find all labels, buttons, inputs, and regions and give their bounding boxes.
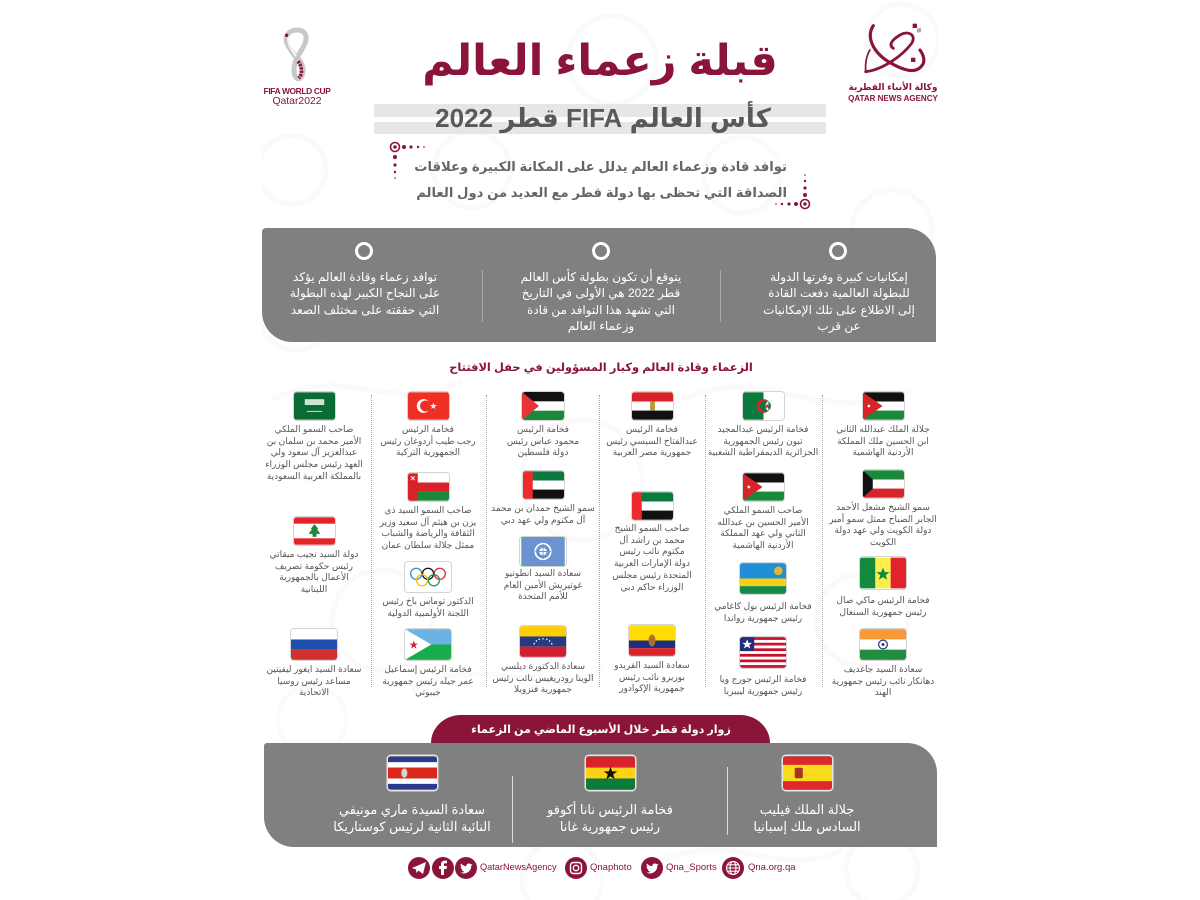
logo: FIFA World Cup Qatar 2022 — [264, 28, 331, 107]
name — [836, 424, 930, 458]
name: اللبنانية — [301, 584, 327, 594]
name: بوريرو نائب رئيس — [619, 672, 685, 682]
name — [753, 801, 861, 835]
social handle: website: Qna.org.qa — [748, 862, 796, 873]
name — [717, 505, 809, 550]
name: محمد بن راشد آل — [619, 535, 685, 545]
leader: Kuwait — [828, 469, 937, 548]
ornament: top left dots — [390, 142, 425, 179]
reason text 3: التي حققته على مختلف الصعد — [291, 303, 439, 317]
name: فخامة الرئيس — [402, 424, 454, 434]
social: website — [722, 857, 744, 879]
leader: UN Secretary General — [504, 536, 582, 602]
leader: Liberia — [720, 636, 806, 696]
leader: Palestine — [507, 391, 579, 458]
name: جمهورية الإكوادور — [619, 683, 685, 693]
reason text 1 — [763, 270, 915, 333]
name: دولة الكويت ولي عهد دولة — [835, 525, 931, 535]
leader: IOC president — [371, 562, 485, 619]
leader: Egypt — [606, 391, 698, 458]
logo: Qatar News Agency — [848, 24, 938, 103]
flag: India — [860, 629, 906, 660]
logo text — [264, 86, 331, 107]
flag: Ghana — [586, 756, 634, 790]
name: الدكتور توماس باخ رئيس — [382, 596, 474, 606]
agency Arabic name: وكالة الأنباء القطرية — [848, 82, 938, 92]
name: جلالة الملك عبدالله الثاني — [836, 424, 930, 434]
name: العهد رئيس مجلس الوزراء — [265, 459, 363, 469]
name: فخامة الرئيس بول كاغامي — [714, 601, 812, 611]
name — [720, 674, 806, 696]
leader: Russia — [257, 629, 371, 699]
visitor: Ghana — [550, 756, 670, 836]
flag: Jordan — [862, 392, 904, 420]
reason marker 2 — [592, 242, 610, 260]
flag: Ecuador — [629, 625, 675, 656]
reason marker 3 — [355, 242, 373, 260]
name — [371, 596, 485, 619]
name: الأردنية الهاشمية — [853, 447, 913, 457]
name: الأعمال بالجمهورية — [279, 572, 349, 582]
flag: Costa Rica — [388, 756, 436, 790]
flag: UAE — [632, 492, 672, 520]
name — [257, 424, 371, 483]
name: عمر جيله رئيس جمهورية — [382, 676, 474, 686]
leader: Jordan crown prince — [717, 472, 809, 550]
visitor: Spain — [747, 756, 867, 836]
social: Telegram — [408, 857, 430, 879]
flag: Algeria — [742, 392, 784, 420]
name: سعادة السيد الفريدو — [614, 660, 690, 670]
name: سمو الشيخ حمدان بن محمد — [491, 503, 595, 513]
name: جلالة الملك فيليب — [760, 802, 854, 817]
name — [836, 595, 930, 618]
leader: India — [832, 628, 934, 698]
name: الثقافة والرياضة والشباب — [381, 528, 475, 538]
panel: visitors — [264, 743, 937, 847]
social handle: QatarNewsAgency: QatarNewsAgency — [480, 862, 557, 872]
social: Twitter sports — [641, 857, 663, 879]
name: الوزراء حاكم دبي — [621, 582, 683, 592]
leader: Rwanda — [714, 562, 812, 624]
flag: UAE — [522, 471, 564, 499]
name: الجابر الصباح ممثل سمو أمير — [829, 514, 937, 524]
name: الوينا رودريغيس نائب رئيس — [492, 673, 594, 683]
flag: Spain — [782, 756, 832, 790]
name — [714, 601, 812, 624]
flag: Russia — [291, 629, 337, 660]
ornament: bottom right dots — [775, 174, 810, 210]
intro text — [414, 159, 787, 200]
name: فخامة الرئيس — [626, 424, 678, 434]
name: غوتيريش الأمين العام — [504, 580, 582, 590]
social: Facebook — [432, 857, 454, 879]
leader: UAE vice president — [612, 491, 692, 592]
name: رئيس جمهورية غانا — [560, 819, 660, 834]
name: رئيس جمهورية السنغال — [840, 607, 926, 617]
flag: Saudi Arabia — [294, 392, 334, 420]
name: الكويت — [870, 537, 896, 547]
social handle: Qnaphoto: Qnaphoto — [590, 862, 632, 873]
name — [547, 801, 673, 835]
name: جمهورية فنزويلا — [514, 684, 572, 694]
leader: Ecuador — [614, 624, 690, 694]
reason marker 1 — [829, 242, 847, 260]
name — [832, 664, 934, 698]
intro text: الصداقة التي تحظى بها دولة قطر مع العديد من دول العالم — [416, 185, 787, 200]
leader: Djibouti — [371, 629, 485, 699]
name: الجمهورية التركية — [396, 447, 460, 457]
name: فخامة الرئيس — [517, 424, 569, 434]
name: الجزائرية الديمقراطية الشعبية — [708, 447, 818, 457]
flag: Lebanon — [294, 517, 334, 545]
name: صاحب السمو الشيخ — [615, 523, 689, 533]
reason text 3: على النجاح الكبير لهذه البطولة — [290, 286, 440, 300]
flag: Jordan — [742, 473, 784, 501]
flag: Palestine — [522, 392, 564, 420]
icon: QNA orbit emblem — [864, 24, 926, 74]
name: فخامة الرئيس جورج ويا — [720, 674, 806, 684]
flag: Liberia — [740, 637, 786, 668]
reason text 1: إمكانيات كبيرة وفرتها الدولة — [770, 270, 908, 284]
leader: Jordan king — [836, 391, 930, 458]
name: الاتحادية — [299, 687, 329, 697]
reason text 1: عن قرب — [817, 319, 861, 333]
visitor: Costa Rica — [352, 756, 472, 836]
name: الهند — [875, 687, 891, 697]
name — [614, 660, 690, 694]
logo text: FIFA WORLD CUP — [264, 86, 330, 96]
name — [371, 664, 485, 699]
name — [828, 502, 937, 548]
name: للأمم المتحدة — [518, 591, 568, 601]
name: مساعد رئيس روسيا — [277, 676, 351, 686]
name: فخامة الرئيس نانا أكوفو — [547, 802, 673, 817]
reason text 2: التي تشهد هذا التوافد من قادة — [527, 303, 675, 317]
name — [504, 568, 582, 602]
flag: Venezuela — [520, 626, 566, 657]
name: سعادة السيدة ماري مونيفي — [339, 802, 485, 817]
name: النائبة الثانية لرئيس كوستاريكا — [333, 819, 491, 834]
name: فخامة الرئيس ماكي صال — [836, 595, 930, 605]
name — [612, 523, 692, 592]
name — [491, 503, 595, 526]
name: دولة السيد نجيب ميقاتي — [270, 549, 358, 559]
intro text: توافد قادة وزعماء العالم يدلل على المكانة الكبيرة وعلاقات — [414, 159, 787, 174]
name: تبون رئيس الجمهورية — [723, 436, 803, 446]
reason text 2: وزعماء العالم — [568, 319, 634, 333]
name: صاحب السمو الملكي — [724, 505, 802, 515]
name: دولة فلسطين — [518, 447, 568, 457]
leader: Oman — [371, 473, 485, 552]
leader: Dubai crown prince — [491, 470, 595, 526]
name: صاحب السمو السيد ذي — [384, 505, 472, 515]
subtitle text: كأس العالم FIFA قطر 2022 — [435, 103, 771, 133]
social handle: Qna_Sports: Qna_Sports — [666, 862, 717, 873]
name: رئيس جمهورية ليبيريا — [724, 686, 802, 696]
name: رئيس حكومة تصريف — [275, 561, 353, 571]
flag: Kuwait — [862, 470, 904, 498]
name — [507, 424, 579, 458]
subtitle with grey bars — [374, 101, 826, 134]
name: سمو الشيخ مشعل الأحمد — [836, 502, 930, 512]
leader: Lebanon — [257, 517, 371, 596]
name: بالمملكة العربية السعودية — [267, 471, 361, 481]
flag: United Nations — [520, 537, 566, 566]
logo text: Qatar2022 — [272, 96, 322, 107]
name: جمهورية مصر العربية — [613, 447, 691, 457]
agency English name: QATAR NEWS AGENCY — [848, 94, 938, 103]
name: رجب طيب أردوغان رئيس — [380, 436, 476, 446]
reason text 3 — [290, 270, 440, 317]
name: دهانكار نائب رئيس جمهورية — [832, 676, 934, 686]
name: المتحدة رئيس مجلس — [612, 570, 692, 580]
ribbon: visitors heading — [431, 715, 770, 743]
name — [333, 801, 491, 835]
name: الثاني ولي عهد المملكة — [720, 528, 806, 538]
name — [486, 661, 600, 696]
name: جيبوتي — [415, 687, 441, 697]
name: مكتوم نائب رئيس — [619, 546, 685, 556]
flag: Oman — [408, 473, 448, 501]
flag: Senegal — [860, 557, 906, 589]
reason text 2 — [521, 268, 681, 333]
title: قبلة زعماء العالم — [422, 37, 778, 85]
reason text 2: قطر 2022 هي الأولى في التاريخ — [522, 286, 680, 300]
leader: Saudi Arabia — [257, 392, 371, 483]
flag: Turkey — [408, 392, 448, 420]
leader: Turkey — [371, 392, 485, 459]
name — [606, 424, 698, 458]
name: الأردنية الهاشمية — [733, 540, 793, 550]
name: عبدالفتاح السيسي رئيس — [606, 436, 698, 446]
name — [708, 424, 818, 458]
reason text 2: يتوقع أن تكون بطولة كأس العالم — [521, 270, 681, 284]
flag: Egypt — [632, 392, 672, 420]
name: رئيس جمهورية رواندا — [724, 613, 802, 623]
name: سعادة السيد جاغديف — [844, 664, 922, 674]
section heading: leaders: الزعماء وقادة العالم وكبار المسؤولين في حفل الافتتاح — [449, 362, 753, 374]
reason text 1: إلى الاطلاع على تلك الإمكانيات — [763, 303, 915, 317]
name: الأمير محمد بن سلمان بن — [267, 436, 361, 446]
name — [371, 505, 485, 552]
name: سعادة الدكتورة ديلسي — [501, 661, 585, 671]
name: دولة الإمارات العربية — [614, 558, 690, 568]
name: سعادة السيد ايغور ليفيتين — [267, 664, 361, 674]
leader: Senegal — [836, 556, 930, 618]
name — [371, 424, 485, 459]
social: Instagram — [565, 857, 587, 879]
flag: Olympic rings — [405, 562, 451, 592]
name: آل مكتوم ولي عهد دبي — [501, 515, 585, 525]
reason text 3: توافد زعماء وقادة العالم يؤكد — [293, 270, 437, 284]
panel: reasons — [262, 228, 936, 342]
leader: Venezuela — [486, 626, 600, 696]
icon: FIFA trophy emblem — [284, 28, 309, 82]
name: الأمير الحسين بن عبدالله — [717, 517, 809, 527]
name — [257, 664, 371, 699]
leader: Algeria — [708, 391, 818, 458]
name: سعادة السيد انطونيو — [505, 568, 581, 578]
ribbon text: زوار دولة قطر خلال الأسبوع الماضي من الزعماء — [471, 724, 731, 736]
name: ممثل جلالة سلطان عمان — [382, 540, 474, 550]
name: صاحب السمو الملكي — [275, 424, 353, 434]
name: عبدالعزيز آل سعود ولي — [271, 447, 357, 457]
flag: Rwanda — [740, 563, 786, 594]
name: السادس ملك إسبانيا — [753, 819, 861, 834]
name: يزن بن هيثم آل سعيد وزير — [380, 517, 476, 527]
flag: Djibouti — [405, 629, 451, 660]
social: Twitter — [455, 857, 477, 879]
name: فخامة الرئيس إسماعيل — [384, 664, 472, 674]
name: اللجنة الأولمبية الدولية — [387, 608, 469, 618]
reason text 1: للبطولة العالمية دفعت القادة — [768, 286, 910, 300]
name: فخامة الرئيس عبدالمجيد — [718, 424, 808, 434]
name: ابن الحسين ملك المملكة — [837, 436, 929, 446]
name: محمود عباس رئيس — [507, 436, 579, 446]
name — [257, 549, 371, 596]
